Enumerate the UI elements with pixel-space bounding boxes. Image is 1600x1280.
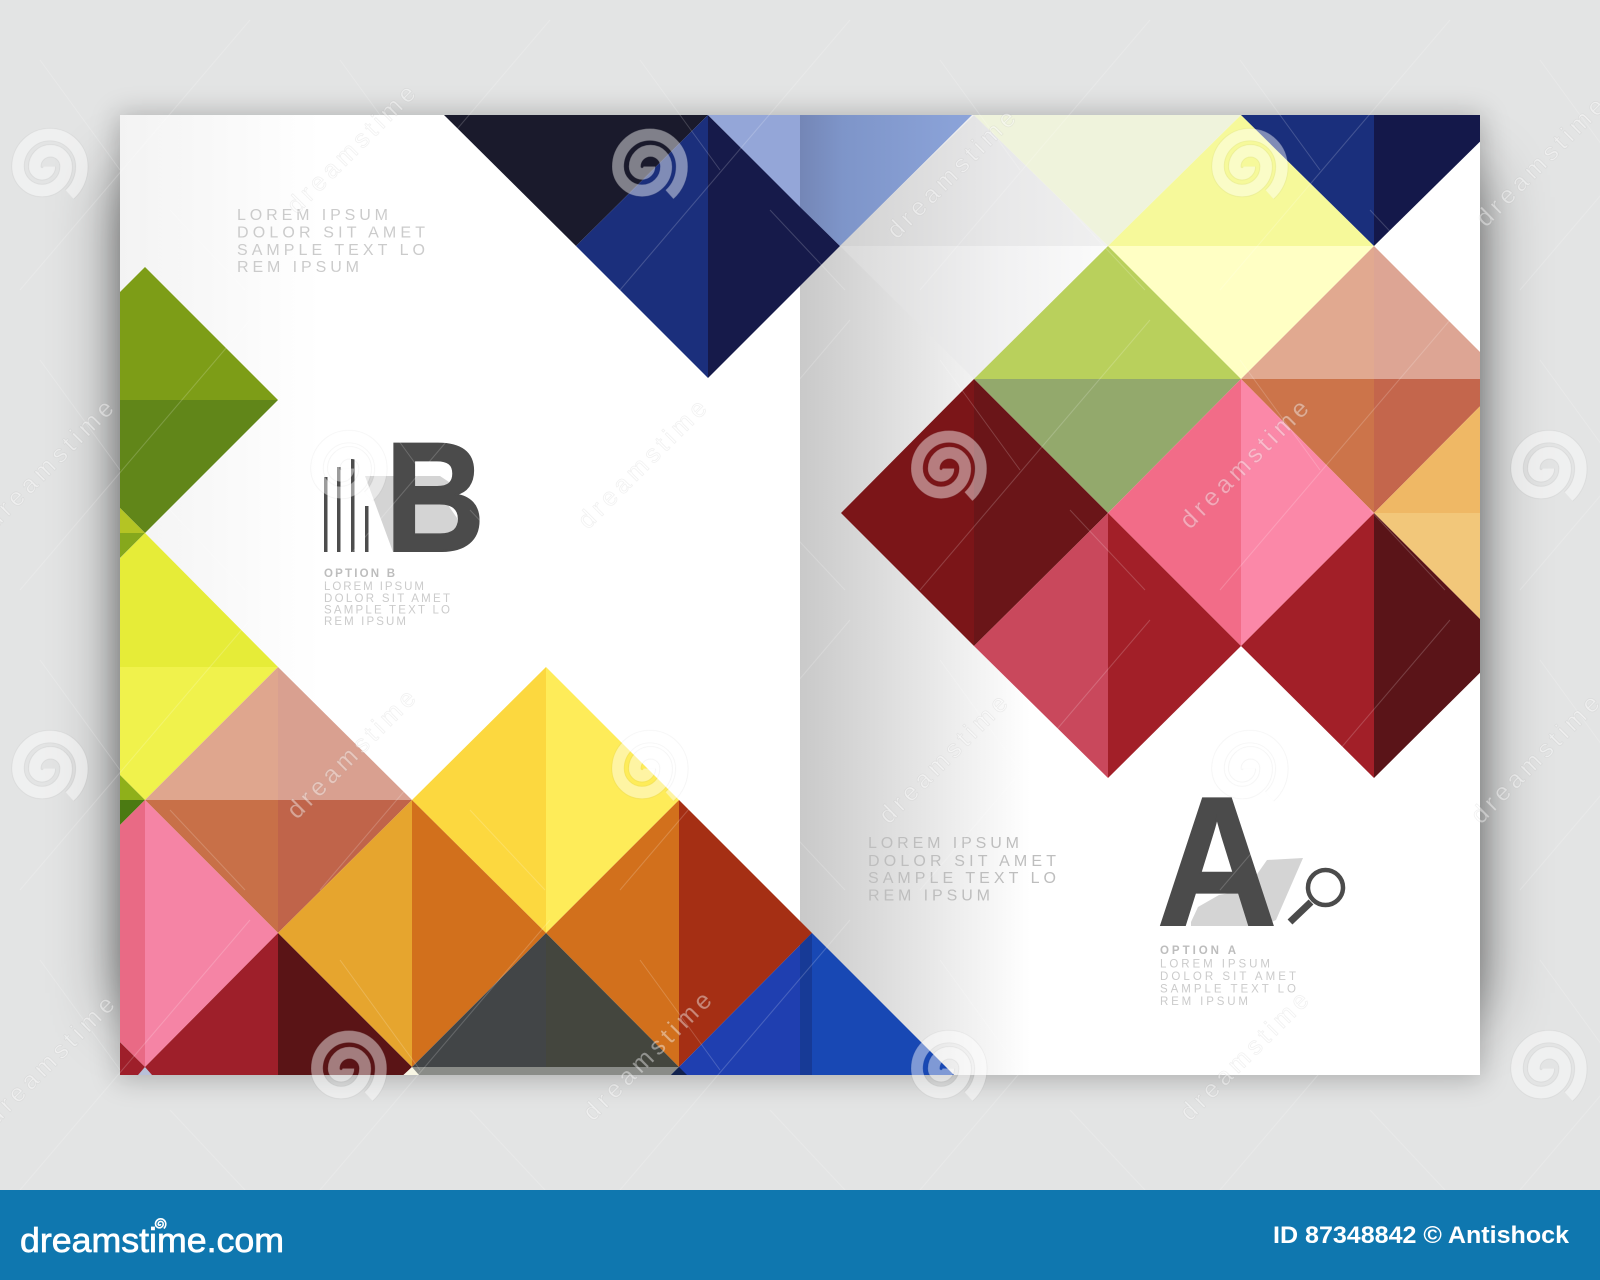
diamond: salmon, page B [145,667,412,933]
diamond: apricot [1374,406,1480,619]
watermark words: dreamstime [1174,986,1314,1126]
diamond: royal blue [666,933,954,1080]
text block: option A: SAMPLE TEXT LO [1160,984,1296,996]
text block: page A lower: LOREM IPSUM [868,835,1019,852]
triangle: pale cream top [974,115,1241,246]
text block: option A [1160,945,1296,1008]
small gap triangles on bottom edge [138,1067,687,1075]
text block: option B: REM IPSUM [324,616,406,628]
watermark words: dreamstime [281,684,421,824]
text block: option A: OPTION A [1160,945,1236,957]
logo: option A [1157,758,1343,964]
diamond: pink, page A [1108,379,1374,646]
text block: page B top: REM IPSUM [237,259,359,276]
diamond: green, page B [120,267,278,533]
page drop shadow: contact [120,115,1480,1075]
diamond: navy, page B [576,115,840,378]
diamond: black navy top [444,115,708,246]
diamond: crimson, page B [132,933,412,1080]
page A background [800,115,1480,1075]
brochure pages [120,115,1480,1075]
footer bar [0,1190,1600,1280]
diamond: burnt orange [546,800,812,1067]
letter shadow: B [365,476,457,552]
text block: option B [324,568,450,628]
diamond: lime edge tip [120,508,145,558]
watermark words: dreamstime [281,79,421,219]
diamond: pale yellow [1108,115,1374,379]
letter: A: A [1157,758,1277,964]
text block: option A: LOREM IPSUM [1160,958,1270,970]
letter shadow: A [1191,858,1303,926]
letter: B: B [385,411,485,585]
diamond: rose red [974,513,1241,778]
diamond: yellow green [974,246,1241,513]
diamond: yellow [412,667,679,933]
page drop shadow: outer soft [120,175,1480,1015]
footer logo text: dreamstime.com [20,1222,284,1260]
watermark words: dreamstime [572,394,712,534]
diamond: charcoal [404,933,687,1080]
text block: page B top [237,207,425,276]
watermark spirals [18,135,1581,1096]
text block: option B: SAMPLE TEXT LO [324,604,450,616]
page B background [120,115,800,1075]
text block: page B top: DOLOR SIT AMET [237,224,425,242]
logo: option B [324,411,485,585]
diamond: pink, page B [120,800,278,1067]
triangle: pale blue top [708,115,972,246]
text block: page B top: SAMPLE TEXT LO [237,242,425,259]
watermark words: dreamstime [881,104,1021,244]
diamond: amber orange [278,800,546,1067]
text block: option B: LOREM IPSUM [324,581,424,593]
text block: page B top: LOREM IPSUM [237,207,388,224]
text block: option B: DOLOR SIT AMET [324,593,450,605]
diamond: maroon [841,379,1108,646]
footer image id: ID 87348842 © Antishock [1273,1222,1570,1249]
diamond: dark red corner [120,1042,145,1075]
diamond: ghost grey [840,116,1108,345]
triangle: navy, page A [1241,115,1480,246]
text block: page A lower: SAMPLE TEXT LO [868,870,1056,887]
diamond: salmon, page A [1241,246,1480,513]
text block: option A: DOLOR SIT AMET [1160,971,1296,983]
watermark words: dreamstime [1174,394,1314,534]
icon: magnifier [1290,870,1343,922]
text block: option B: OPTION B [324,568,395,580]
icon: footer spiral [156,1219,166,1228]
icon: bars [324,459,368,552]
text block: page A lower: REM IPSUM [868,888,990,904]
diamond: red [1241,513,1480,778]
text block: option A: REM IPSUM [1160,996,1248,1008]
diamond: olive edge tip [120,775,145,825]
diamond: lime yellow [120,533,278,800]
text block: page A lower: DOLOR SIT AMET [868,853,1056,870]
watermark words: dreamstime [873,689,1013,829]
text block: page A lower [868,835,1056,904]
watermark words: dreamstime [577,986,717,1126]
